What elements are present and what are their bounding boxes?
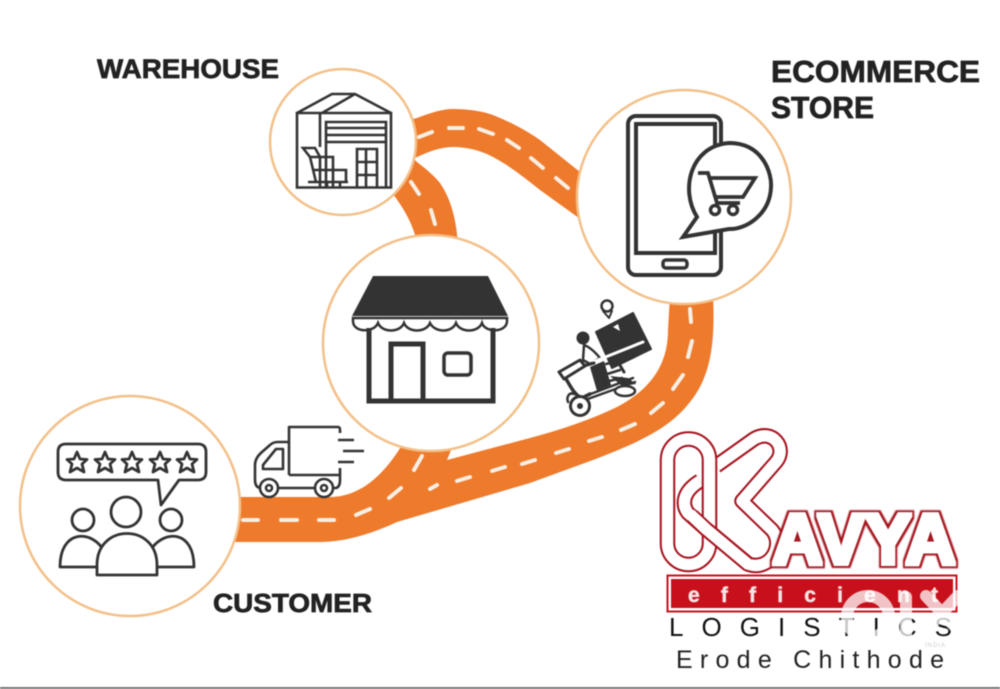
logo text: logistics: LOGISTICS xyxy=(669,612,952,642)
logo text: location: Erode Chithode xyxy=(676,646,944,674)
label: customer: CUSTOMER xyxy=(213,588,372,618)
icon: delivery scooter xyxy=(559,300,651,416)
label: warehouse: WAREHOUSE xyxy=(97,54,279,84)
road lane dashes xyxy=(243,128,692,520)
watermark: OLX xyxy=(847,596,958,649)
road: warehouse to store xyxy=(400,109,590,226)
red banner xyxy=(668,576,956,612)
icon: shop xyxy=(352,276,508,401)
road network xyxy=(232,109,714,542)
watermark: OLX: INDIA xyxy=(925,643,946,649)
red banner: efficient xyxy=(688,584,938,607)
circle: warehouse xyxy=(270,69,416,215)
icon: phone with cart bubble xyxy=(628,116,771,275)
circle: customer xyxy=(20,396,240,616)
label: ecommerce store: STORE xyxy=(771,90,874,125)
bottom edge line xyxy=(0,687,1000,689)
logo: Kavya xyxy=(668,436,956,674)
icon: customers with rating xyxy=(58,444,206,575)
label: ecommerce store: ECOMMERCE xyxy=(771,54,980,89)
circle: ecommerce store xyxy=(577,90,791,304)
road: warehouse to shop xyxy=(390,155,458,245)
circle: shop xyxy=(323,235,539,451)
icon: delivery truck xyxy=(255,427,364,497)
icon: warehouse xyxy=(297,94,391,188)
logo text: AVYA: AVYA xyxy=(772,500,956,580)
logo mark: K links xyxy=(668,436,780,565)
road: customer to store and shop xyxy=(232,295,714,542)
